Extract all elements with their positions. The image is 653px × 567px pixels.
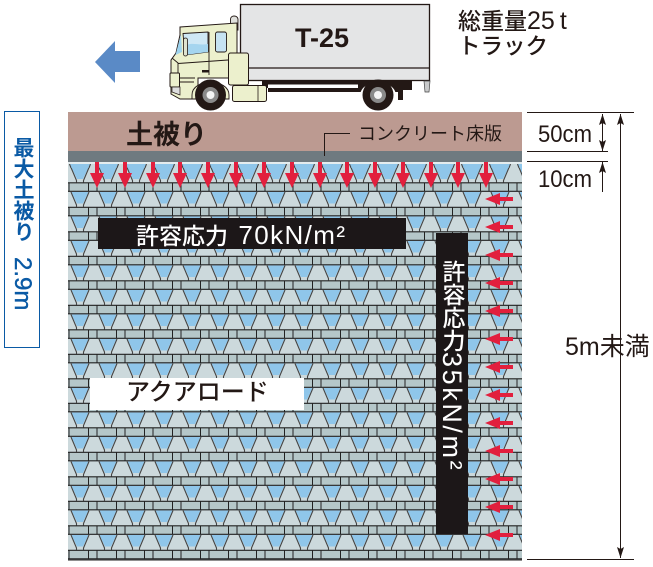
dimension lines [527, 112, 634, 560]
black band: lateral allowable stress [436, 233, 468, 534]
label: vertical allowable stress: 許容応力 70kN/m² [136, 220, 346, 250]
label: maximum soil cover: 最大土被り 2.9m [9, 137, 36, 310]
panel: maximum soil cover [4, 111, 40, 348]
truck cargo box [240, 4, 430, 80]
truck cab [171, 23, 237, 99]
label: 5m limit: 5m未満 [565, 333, 650, 361]
panel: concrete slab [68, 151, 522, 162]
label: 50cm: 50cm [538, 121, 592, 148]
label: soil cover: 土被り [126, 120, 207, 150]
label: lateral allowable stress: 許容応力 35kN/m² [437, 260, 467, 472]
label: truck name: T-25 [295, 23, 349, 53]
black band: vertical allowable stress [98, 218, 406, 249]
truck rear wheel [360, 80, 396, 110]
label: 10cm: 10cm [538, 166, 592, 193]
dimension arrowheads [599, 114, 624, 558]
arrows: lateral load [485, 193, 513, 541]
icon: truck [170, 4, 430, 110]
label: concrete slab: コンクリート床版 [358, 124, 502, 144]
truck front wheel [192, 80, 229, 110]
arrows: vertical load [90, 162, 493, 188]
label: product name: アクアロード [126, 379, 269, 406]
panel: soil cover layer [68, 112, 522, 151]
leader line: concrete slab [324, 134, 350, 156]
truck chassis [262, 81, 412, 100]
label: truck type: トラック [458, 34, 548, 59]
panel: aqua road block structure [68, 162, 522, 560]
label: gross weight: 総重量25t [458, 7, 567, 35]
white band: product name [90, 378, 304, 410]
truck exhaust [230, 16, 238, 30]
arrow: travel direction [95, 41, 140, 83]
